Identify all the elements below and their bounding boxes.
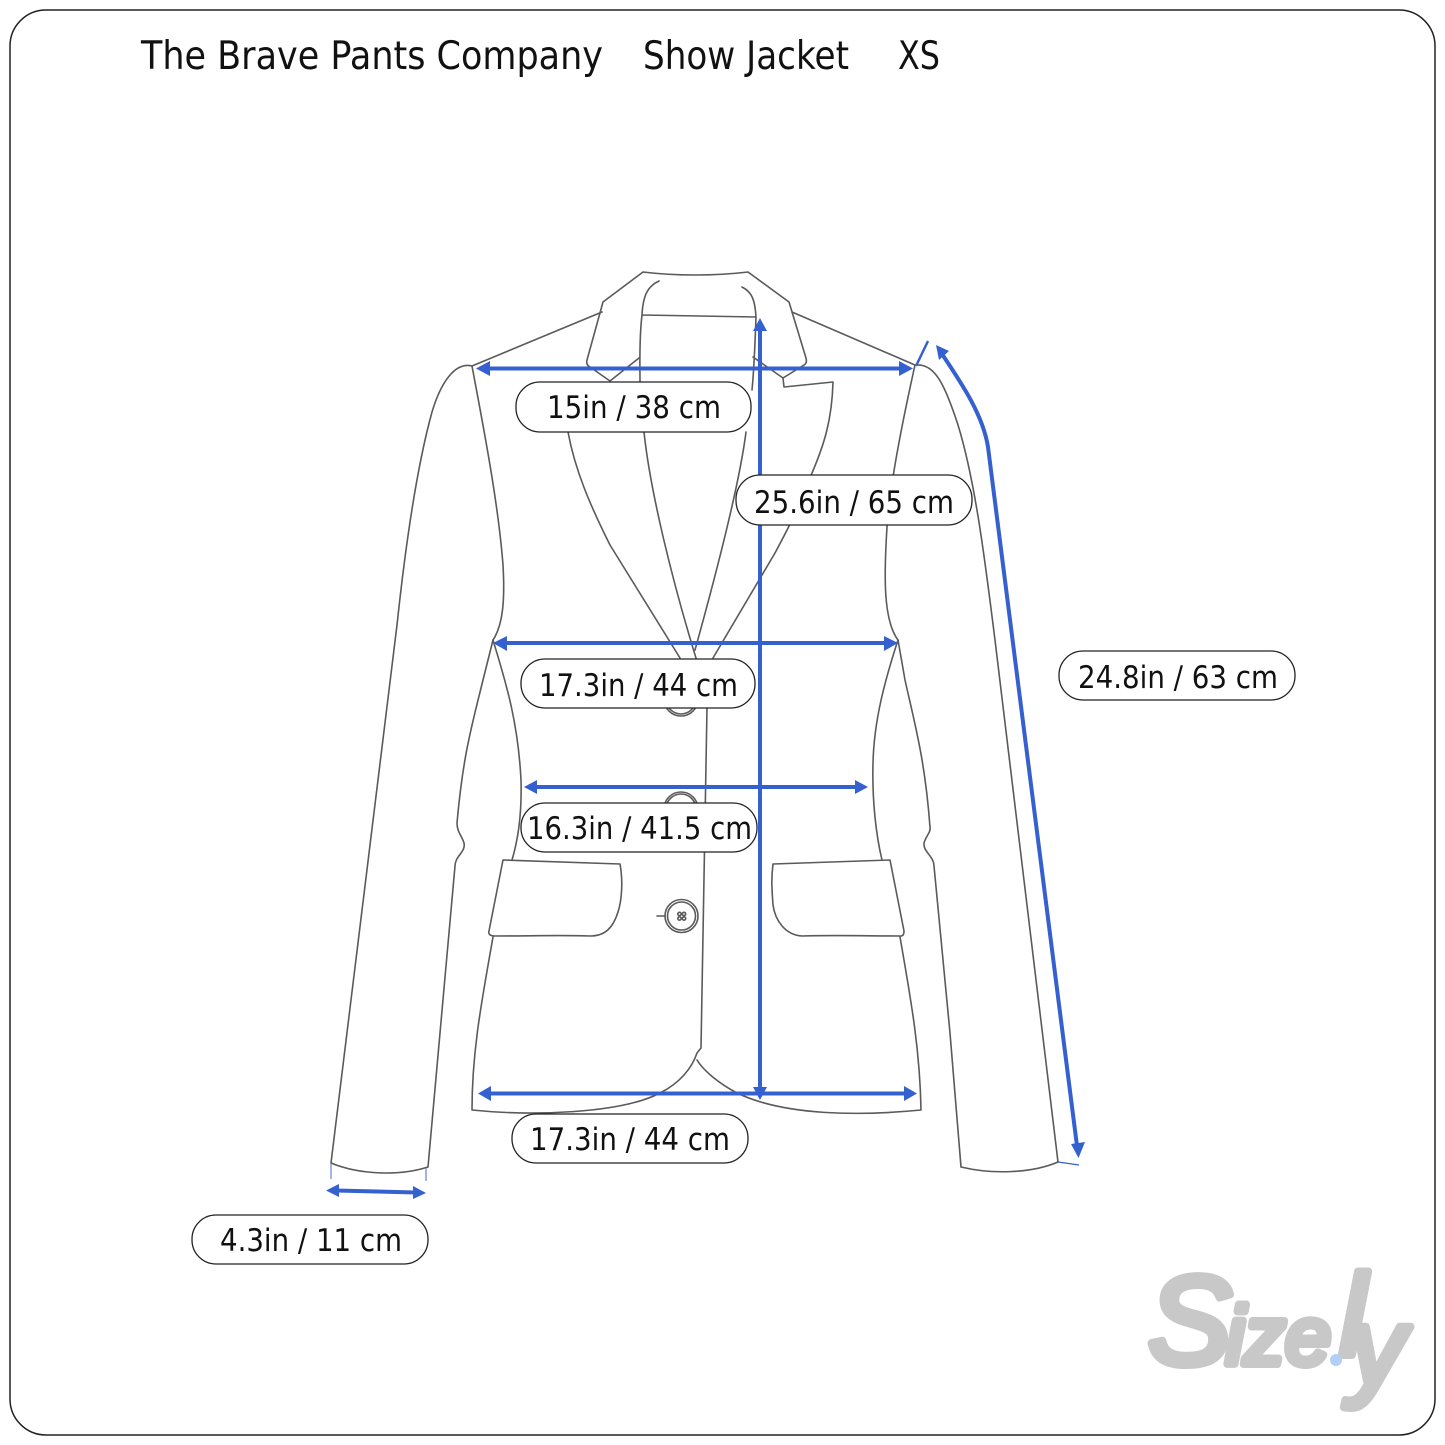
label: sleeve: 24.8in / 63 cm bbox=[1078, 660, 1278, 696]
arrow: sleeve length bbox=[916, 341, 1085, 1165]
label: shoulder bbox=[516, 382, 751, 432]
jacket outline drawing bbox=[331, 272, 1058, 1173]
title bbox=[140, 34, 940, 79]
left lapel bbox=[568, 432, 680, 658]
label: waist: 16.3in / 41.5 cm bbox=[527, 811, 752, 847]
title: XS bbox=[898, 34, 940, 79]
collar bbox=[587, 272, 806, 381]
label: body length bbox=[736, 475, 972, 525]
left sleeve bbox=[331, 365, 493, 1173]
title: The Brave Pants Company bbox=[140, 34, 603, 79]
centre neckline lines bbox=[644, 432, 746, 658]
label: hem bbox=[512, 1114, 748, 1163]
buttons bbox=[657, 682, 698, 932]
logo: Size.ly: y bbox=[1343, 1286, 1411, 1409]
left pocket flap bbox=[489, 860, 622, 936]
arrow: chest width bbox=[493, 636, 898, 651]
inner neck bbox=[640, 281, 756, 390]
right lapel bbox=[713, 378, 833, 658]
arrow: cuff width bbox=[326, 1164, 426, 1199]
label: cuff: 4.3in / 11 cm bbox=[220, 1223, 402, 1259]
logo: Size.ly: S bbox=[1148, 1252, 1231, 1391]
label: sleeve bbox=[1059, 651, 1295, 700]
label: waist bbox=[521, 803, 757, 852]
label: chest bbox=[521, 659, 755, 708]
label: cuff bbox=[192, 1215, 428, 1264]
right pocket flap bbox=[772, 860, 904, 936]
label: body length: 25.6in / 65 cm bbox=[754, 485, 954, 521]
logo: Size.ly: ize bbox=[1226, 1291, 1331, 1382]
arrow: shoulder width bbox=[476, 361, 913, 376]
label: hem: 17.3in / 44 cm bbox=[530, 1122, 730, 1158]
logo: Size.ly bbox=[1148, 1252, 1411, 1409]
arrow: waist width bbox=[524, 780, 868, 794]
right sleeve bbox=[898, 365, 1058, 1172]
label: shoulder: 15in / 38 cm bbox=[547, 390, 721, 426]
logo: Size.ly: l bbox=[1340, 1252, 1369, 1380]
jacket body right side bbox=[697, 312, 921, 1113]
jacket body left side bbox=[472, 312, 707, 1113]
label: chest: 17.3in / 44 cm bbox=[539, 668, 738, 704]
title: Show Jacket bbox=[643, 34, 849, 79]
arrow: body length bbox=[753, 318, 767, 1100]
arrow: hem width bbox=[478, 1086, 917, 1101]
